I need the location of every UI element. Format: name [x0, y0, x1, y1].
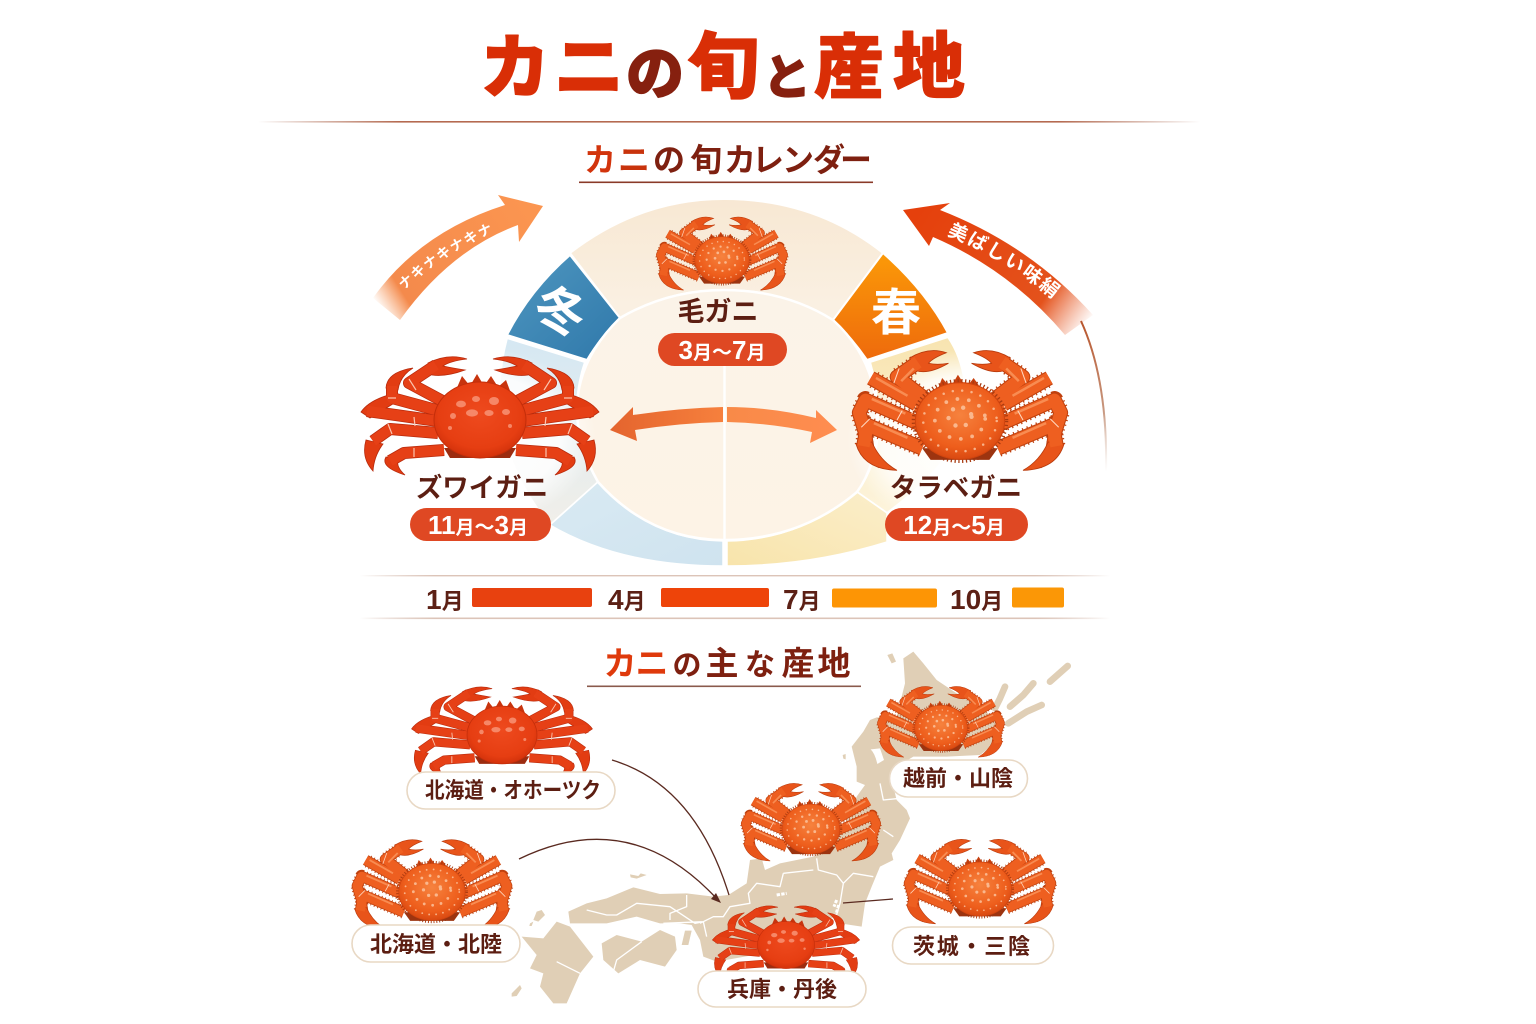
title divider — [258, 121, 1200, 123]
map: Awaji — [682, 931, 692, 945]
month: January — [426, 584, 592, 616]
sector: bottom right — [727, 492, 887, 566]
title: ニ — [554, 12, 624, 113]
month: October — [950, 584, 1064, 616]
heading: calendar — [579, 135, 873, 183]
pill: Ibaraki — [892, 927, 1054, 964]
map: Kuril islands — [995, 666, 1068, 723]
label: spring: 春 — [871, 273, 921, 345]
title: 地 — [893, 8, 965, 113]
heading: areas: ニ — [636, 637, 668, 685]
month: July: 7月 — [783, 584, 821, 616]
panel: production areas — [352, 637, 1068, 1007]
crab: hairy crab — [659, 217, 785, 290]
pill: Echizen — [890, 760, 1028, 797]
pill: Okhotsk: 北海道・オホーツク — [425, 773, 601, 805]
map: inner bay — [871, 748, 884, 764]
sector: spring — [833, 253, 948, 360]
map: Rishiri island — [887, 653, 896, 663]
crab: snow crab — [361, 357, 599, 475]
sector: spring light — [857, 337, 966, 513]
month: October: 10月 — [950, 584, 1003, 616]
glow behind king crab — [847, 350, 1083, 530]
month: January: 1月 — [426, 584, 464, 616]
title: 産 — [814, 12, 884, 113]
title: と — [763, 38, 811, 108]
label: winter: 冬 — [526, 266, 596, 350]
heading: calendar: の — [653, 135, 685, 181]
panel: month bar — [360, 575, 1110, 619]
heading: calendar: ン — [782, 135, 814, 181]
crab: Hokuriku — [355, 840, 509, 929]
heading: calendar: 旬 — [690, 135, 722, 181]
connector: Ibaraki — [843, 899, 893, 903]
map: Oki — [630, 873, 647, 879]
pill: king crab months — [885, 508, 1028, 541]
season wheel — [499, 199, 966, 566]
pill: hairy crab months — [658, 333, 787, 366]
map: Iki — [529, 922, 533, 926]
heading: areas: 産 — [782, 637, 814, 685]
arrow: left sweep — [374, 195, 543, 320]
heading: areas: 地 — [818, 637, 850, 685]
sector: winter — [507, 255, 620, 360]
title — [480, 8, 965, 113]
sector: top — [570, 199, 883, 320]
map: Sado — [843, 754, 846, 759]
map: Tsushima — [533, 910, 545, 922]
crab: centre — [744, 783, 878, 861]
heading: calendar: ニ — [618, 135, 650, 181]
map: prefecture lines — [587, 783, 900, 937]
map: Goto — [512, 985, 522, 997]
month: July — [783, 584, 937, 616]
pill: king crab months: 12月～5月 — [903, 510, 1005, 540]
heading: areas: な — [745, 640, 775, 684]
title: の — [626, 27, 684, 111]
map: Kyushu line — [557, 962, 580, 973]
pill: snow crab months — [410, 508, 551, 541]
arrow: centre right — [727, 407, 837, 443]
pill: Hyogo — [698, 971, 866, 1007]
pill: Ibaraki: 茨城・三陰 — [913, 929, 1030, 961]
heading: areas: カ — [604, 637, 636, 685]
map: Honshu and Hokkaido — [568, 652, 1000, 962]
label: hairy crab: 毛ガニ — [678, 290, 758, 329]
connector: Okhotsk — [612, 760, 729, 895]
pill: Echizen: 越前・山陰 — [903, 761, 1013, 793]
pill: snow crab months: 11月～3月 — [428, 510, 528, 540]
crab: Hyogo — [712, 906, 860, 979]
map of Japan — [512, 652, 1068, 1003]
map: Shikoku line — [613, 942, 642, 972]
map: Tokyo bay — [777, 893, 839, 917]
label: snow crab: ズワイガニ — [416, 466, 548, 505]
heading: calendar: レ — [752, 135, 784, 181]
pill: Hokuriku — [352, 925, 520, 962]
pill: Hyogo: 兵庫・丹後 — [727, 972, 837, 1004]
month: April — [608, 584, 769, 616]
crab: king crab — [856, 351, 1064, 470]
month: April: 4月 — [608, 584, 646, 616]
heading: calendar: ダ — [813, 135, 845, 181]
connector: Hokuriku — [519, 839, 721, 903]
heading: areas: 主 — [706, 637, 738, 685]
title: カ — [480, 12, 550, 113]
arrow: right sweep: 美ばしい味絹 — [948, 222, 1062, 299]
panel: seasonal calendar — [360, 135, 1107, 566]
heading: calendar: ー — [840, 135, 872, 181]
heading: areas — [587, 637, 861, 687]
pill: Hokuriku: 北海道・北陸 — [370, 927, 502, 959]
crab: Echizen — [880, 686, 1002, 757]
title: 旬 — [687, 8, 759, 113]
arrow: centre left — [610, 407, 723, 441]
heading: areas: の — [672, 642, 702, 684]
inner divider — [723, 366, 726, 540]
crab: Okhotsk — [412, 687, 592, 777]
map: Shikoku — [602, 930, 677, 973]
heading: calendar: カ — [584, 135, 616, 181]
label: king crab: タラベガニ — [890, 466, 1022, 505]
glow behind snow crab — [360, 348, 596, 524]
map: Kyushu — [522, 922, 593, 1003]
pill: hairy crab months: 3月～7月 — [679, 335, 765, 365]
arrow: right sweep — [903, 203, 1107, 464]
heading: calendar: カ — [724, 135, 756, 181]
inner disc — [577, 290, 877, 540]
crab: Ibaraki — [907, 839, 1053, 924]
sector: bottom left — [550, 482, 723, 566]
sector: winter light — [499, 338, 598, 525]
